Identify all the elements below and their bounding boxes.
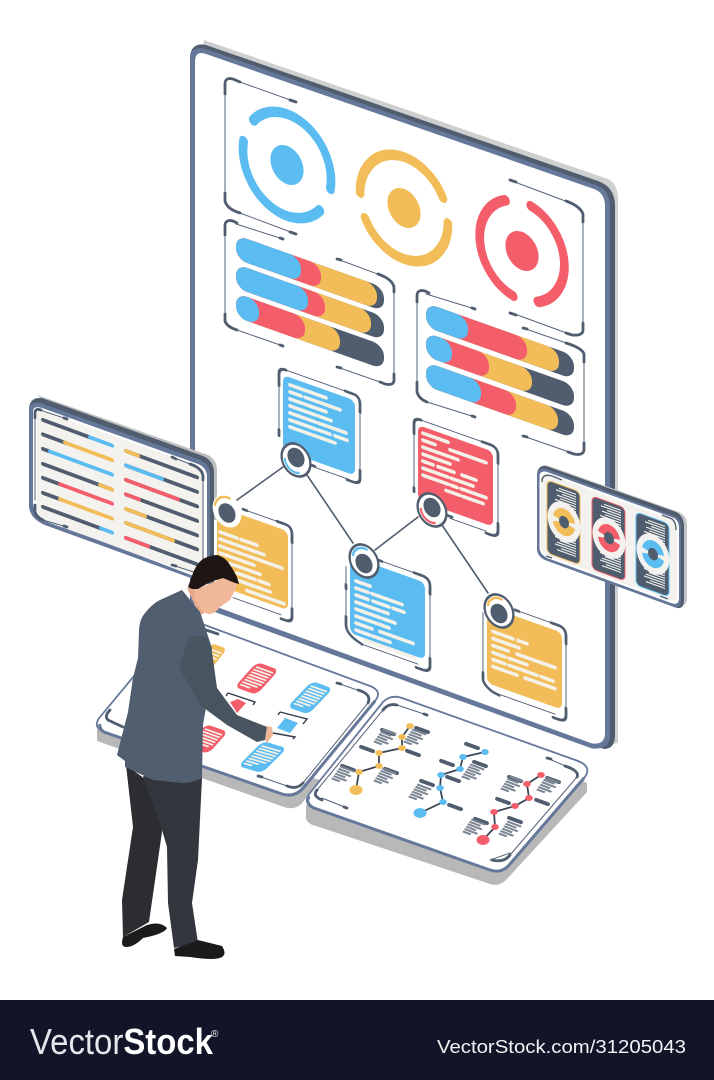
flow card: red lower: [186, 724, 228, 754]
flow card: blue lower: [238, 741, 287, 773]
panel: blue ring chart: [225, 79, 331, 234]
flow card: yellow: [196, 643, 227, 669]
connector lines: [237, 467, 488, 593]
route: yellow: [332, 723, 428, 795]
bar 3: [236, 293, 384, 370]
flow card: blue top: [287, 681, 333, 715]
card: yellow left: [217, 500, 292, 623]
hair: [188, 555, 239, 589]
flow connector: red square: [226, 693, 255, 713]
side panel: right mini cards: [537, 465, 687, 608]
bar 3: [426, 362, 574, 439]
panel: red ring chart: [480, 180, 583, 335]
mini card blue: [636, 512, 670, 597]
coat: [117, 590, 212, 783]
left shoe: [122, 924, 167, 947]
card: red: [414, 418, 498, 537]
route: red: [463, 772, 559, 845]
list rows right: [126, 451, 197, 564]
node: blue lower: [350, 541, 378, 581]
node: yellow right: [485, 591, 513, 631]
neck: [187, 586, 205, 616]
card: blue lower: [346, 549, 430, 672]
route: blue: [409, 744, 489, 818]
node: yellow left: [213, 491, 241, 531]
face: [195, 578, 237, 614]
arm: [179, 635, 267, 742]
image id: VectorStock.com/31205043: [437, 1036, 686, 1057]
flow connector: blue square: [271, 712, 307, 739]
panel: stacked bars left: [225, 221, 394, 384]
card: yellow right: [483, 599, 566, 722]
node: red: [418, 490, 446, 530]
panel: stacked bars right: [417, 291, 584, 454]
bar 2: [426, 332, 574, 409]
front leg: [143, 776, 202, 948]
list rows left: [43, 420, 112, 533]
floor table: route charts: [306, 697, 587, 885]
node: blue top: [282, 440, 310, 480]
mini card red: [592, 496, 626, 581]
footer bar: [0, 1000, 714, 1080]
right shoe: [174, 940, 224, 959]
mini card yellow: [547, 480, 580, 565]
floor table: flow chart: [97, 619, 378, 808]
logo wordmark: VectorStock: [30, 1021, 214, 1062]
hand: [262, 725, 273, 743]
flow card: red top: [234, 662, 279, 695]
registered mark: ®: [211, 1029, 219, 1040]
panel: yellow ring chart: [360, 142, 448, 274]
bar 1: [236, 235, 384, 312]
side panel: left list: [29, 395, 217, 586]
back leg: [122, 765, 162, 937]
man: [117, 555, 273, 959]
bar 1: [426, 303, 574, 380]
card: blue top: [279, 368, 360, 484]
bar 2: [236, 264, 384, 341]
main board: [190, 40, 618, 749]
